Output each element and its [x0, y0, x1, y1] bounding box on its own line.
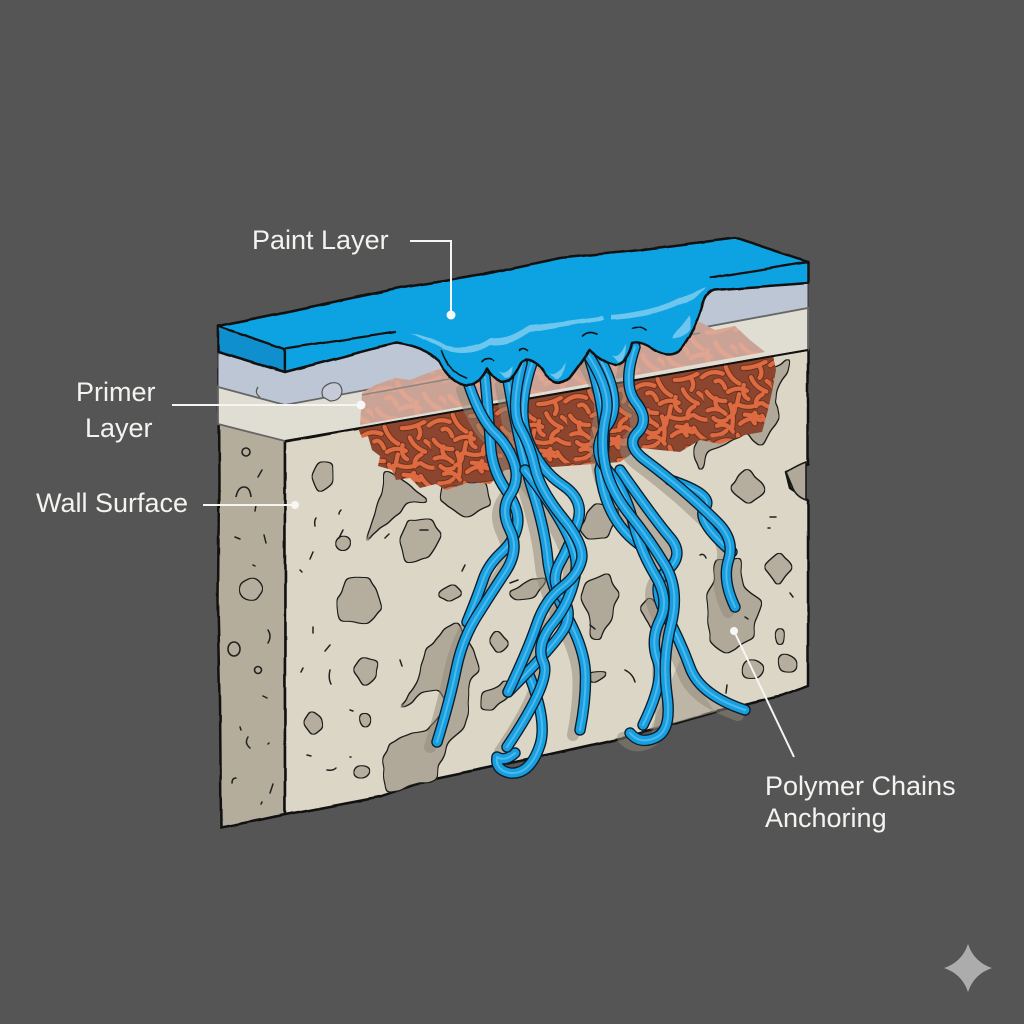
polymer chains: [430, 347, 745, 773]
wall pores: [240, 462, 796, 778]
primer lower band: [218, 308, 808, 441]
fibre boundary line: [285, 350, 808, 441]
primer layer: [218, 283, 808, 441]
paint front strip: [285, 332, 396, 372]
chain: right braid: [585, 347, 745, 740]
label: Primer Layer: Layer: [85, 413, 153, 443]
label: Polymer Chains Anchoring: Polymer Chains: [765, 771, 956, 801]
label: Wall Surface: [36, 488, 299, 518]
drip creases: [442, 327, 646, 378]
leader: Wall Surface: [203, 501, 299, 509]
saturated fibres: [358, 355, 776, 490]
chain shadows: [430, 352, 738, 752]
label: Primer Layer: [76, 377, 366, 443]
wall specks: [232, 470, 793, 804]
red fibre primer network: [285, 322, 808, 490]
leader: Paint Layer: [410, 241, 456, 320]
label: Polymer Chains Anchoring: Anchoring: [765, 803, 887, 833]
primer upper band: [218, 283, 808, 405]
shadow under bottom-right chain: [650, 660, 715, 730]
wall front face: [285, 350, 808, 815]
paint left front edge: [218, 326, 285, 372]
paint edge lines: [218, 262, 808, 372]
label: Paint Layer: Paint Layer: [252, 225, 389, 255]
paint top face and drip: [218, 238, 808, 385]
label: Primer Layer: Primer: [76, 377, 156, 407]
primer marks: [256, 383, 342, 401]
leader: Polymer Chains: [730, 627, 794, 757]
band line over faded fibres: [362, 333, 700, 395]
label: Polymer Chains Anchoring: [730, 627, 956, 833]
paint outline: [218, 238, 808, 385]
chain: left braid: [437, 377, 518, 742]
wall block: [218, 326, 808, 828]
side face pore rings: [228, 448, 262, 674]
wall side face: [218, 326, 285, 828]
paint layer: [218, 238, 808, 385]
worn patches: [360, 357, 792, 792]
chain: centre braid: [497, 363, 586, 773]
leader: Primer Layer: [172, 400, 366, 410]
paint gloss highlights: [411, 288, 706, 379]
icon: sparkle: [944, 944, 992, 992]
label: Paint Layer: [252, 225, 456, 320]
wall notch: [786, 462, 806, 500]
label: Wall Surface: Wall Surface: [36, 488, 188, 518]
faded fibres: [360, 322, 765, 425]
